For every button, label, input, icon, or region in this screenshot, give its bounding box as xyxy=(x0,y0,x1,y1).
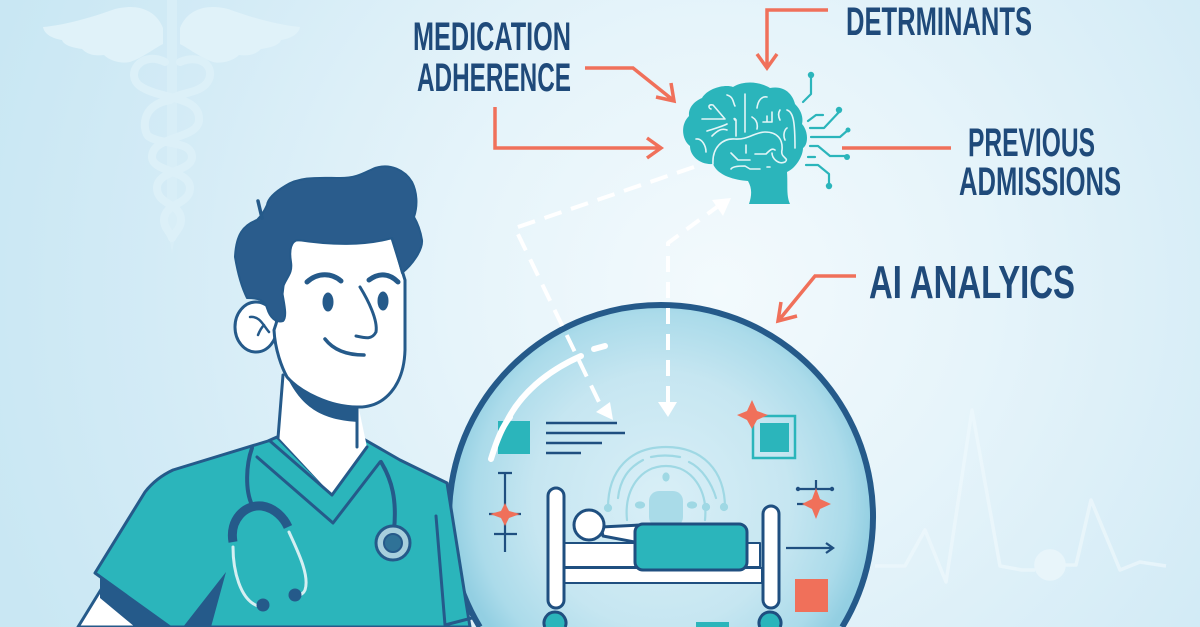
heading: AI analytics: AI ANALYICS xyxy=(869,256,1075,308)
icon: right arrow xyxy=(786,543,833,553)
arrows: coral pointers toward the brain and orb xyxy=(495,10,951,321)
heading: previous admissions: PREVIOUS xyxy=(968,121,1095,165)
icon: coral square xyxy=(795,579,828,612)
arrow: medication adherence lower xyxy=(495,107,661,158)
icon: node cross with star xyxy=(796,480,834,519)
heading: previous admissions xyxy=(959,121,1121,204)
icon: faint caduceus watermark xyxy=(43,0,300,253)
icon: faint scan arcs behind patient xyxy=(605,447,727,527)
ear xyxy=(235,302,277,352)
icon: vertical gauge with star xyxy=(489,473,521,552)
icon: teal square at bottom xyxy=(696,622,729,627)
arrow: medication adherence upper xyxy=(585,68,674,101)
face xyxy=(274,238,405,407)
icon: hospital bed and patient xyxy=(544,488,781,627)
hair lock xyxy=(258,201,262,218)
flow: curved scan arc xyxy=(491,356,581,459)
flow: brain to patient, left route xyxy=(515,167,694,404)
heading: medication adherence: MEDICATION xyxy=(413,15,571,59)
scrubs top xyxy=(95,437,470,627)
heading: determinants: DETRMINANTS xyxy=(846,0,1032,44)
arrow: previous admissions line xyxy=(842,146,951,150)
jaw shadow xyxy=(287,377,358,422)
hair xyxy=(235,166,422,321)
nurse figure xyxy=(78,166,472,627)
icon: data lines and teal square xyxy=(498,421,625,454)
flow: patient to brain xyxy=(668,207,717,402)
arrows: white dashed data flows xyxy=(491,167,731,459)
neck xyxy=(278,372,367,495)
face features xyxy=(307,275,398,355)
arm xyxy=(78,583,170,627)
heading: medication adherence: ADHERENCE xyxy=(417,56,571,100)
heading: medication adherence xyxy=(413,15,571,100)
orb: magnifier circle with hospital bed scene xyxy=(449,305,873,627)
pocket line xyxy=(436,516,472,625)
stethoscope xyxy=(232,448,410,612)
icon: teal brain with circuits xyxy=(683,72,850,204)
icon: faint ECG heartbeat line xyxy=(875,410,1166,582)
icon: star with framed square xyxy=(737,400,795,458)
armpit shadow xyxy=(183,572,226,627)
arrow: AI analytics to orb xyxy=(778,276,856,321)
arrow: determinants to brain xyxy=(757,10,828,68)
collar xyxy=(257,441,380,523)
